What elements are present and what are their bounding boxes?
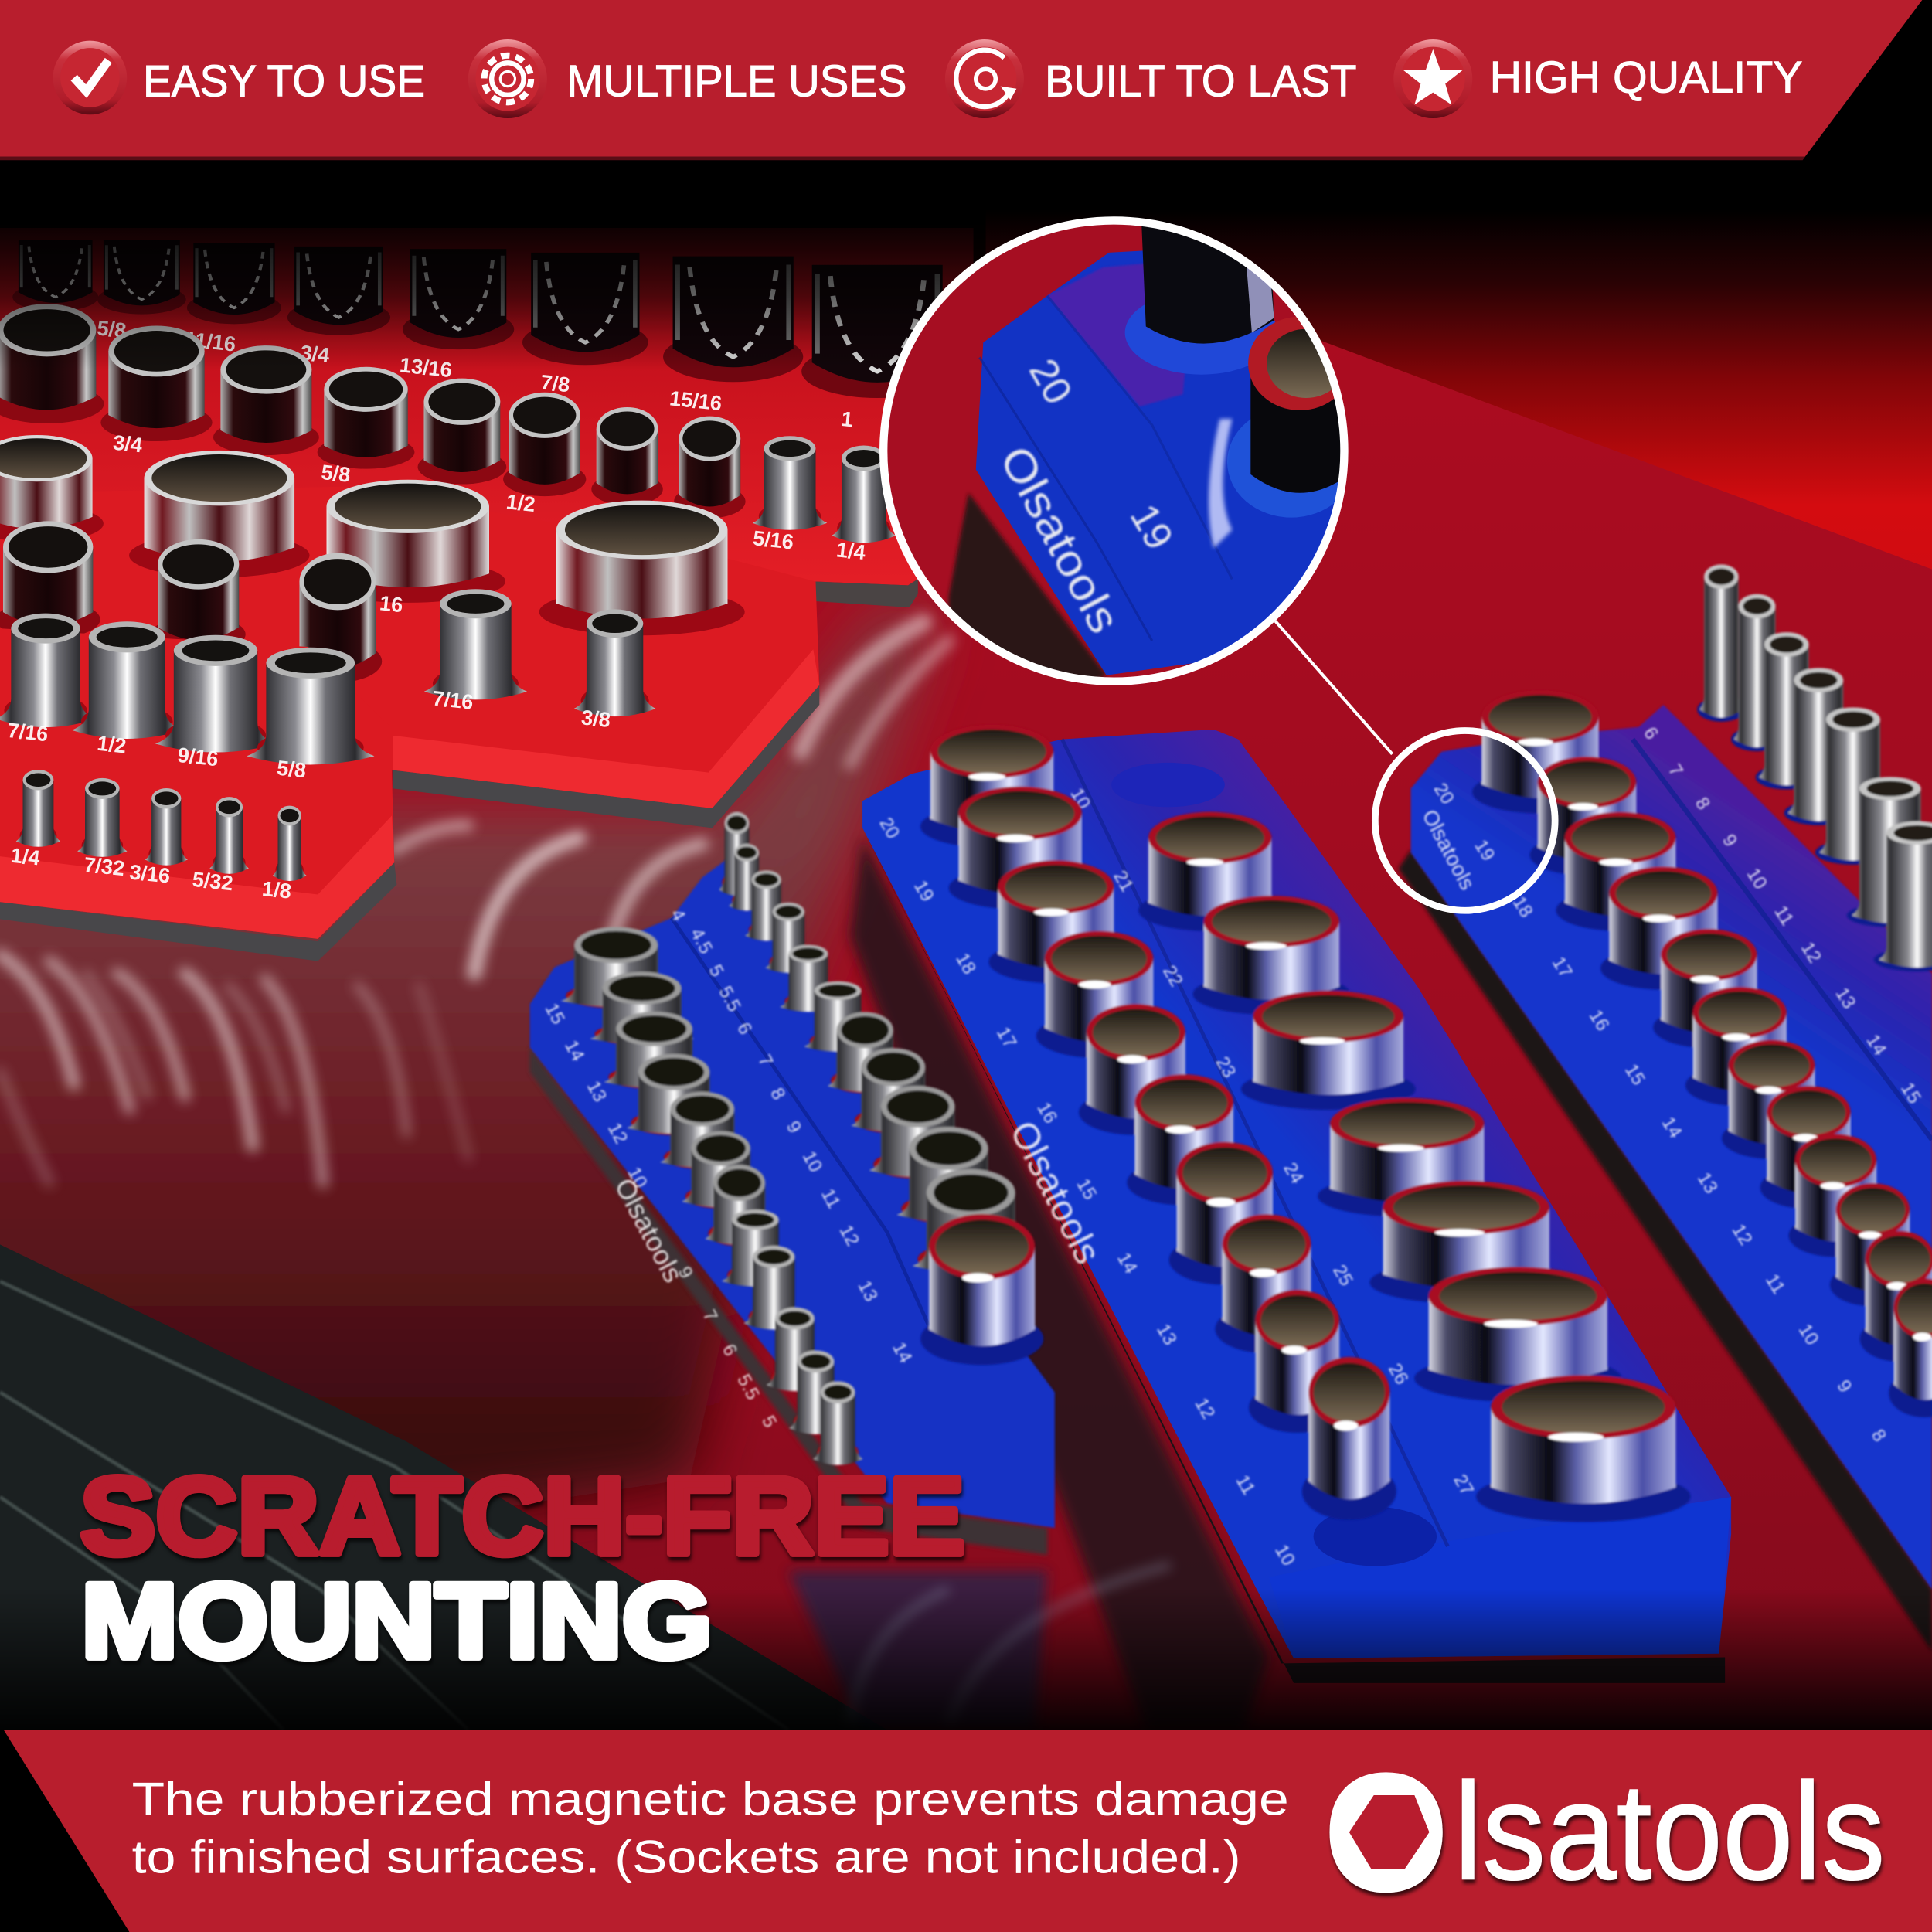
labels: middle tray sizes: 3/8: [580, 705, 611, 732]
labels: back tray lower sizes: 5/8: [320, 460, 352, 487]
labels: large tray numbers: 10: [1270, 1541, 1299, 1570]
labels: right tray numbers: 16: [1585, 1006, 1614, 1035]
labels: right tray numbers: 11: [1770, 902, 1798, 930]
labels: front tray sizes: 1/4: [10, 843, 41, 870]
labels: large tray numbers: 21: [1109, 867, 1138, 895]
labels: right tray numbers: 12: [1797, 938, 1825, 967]
labels: middle tray sizes: 7/16: [431, 686, 474, 714]
red tray: back row: [0, 228, 974, 607]
labels: front tray sizes: 5/32: [191, 867, 234, 895]
labels: small tray numbers: 4: [666, 906, 689, 925]
labels: back tray upper sizes: 3/4: [299, 340, 331, 367]
labels: right tray numbers: 17: [1548, 953, 1577, 981]
labels: right tray numbers: 18: [1509, 893, 1537, 921]
lens labels: 20, 19 and logo: 19: [1122, 497, 1182, 556]
bottom shadow above the footer: [0, 1590, 1932, 1730]
labels: right tray numbers: 10: [1743, 865, 1771, 893]
labels: right tray numbers: 9: [1718, 831, 1741, 850]
description text: [132, 1773, 1289, 1883]
labels: small tray numbers: 15: [541, 1000, 569, 1028]
labels: right tray numbers: [1418, 723, 1925, 1446]
labels: large tray numbers: 23: [1212, 1053, 1240, 1081]
logo: Olsatools: [1329, 1747, 1885, 1917]
sockets: right tray thin column: [1697, 564, 1932, 971]
labels: large tray numbers: 16: [1032, 1099, 1061, 1127]
labels: small tray numbers: Olsatools: [609, 1173, 689, 1287]
labels: small tray numbers: 7: [753, 1051, 777, 1070]
icon: star: [1393, 39, 1472, 118]
red tray: front: [0, 614, 396, 961]
callout line: small circle to lens: [1275, 621, 1393, 754]
labels: back tray upper sizes: 13/16: [399, 352, 453, 382]
labels: large tray numbers: 10: [1066, 784, 1094, 813]
blue tray: large centre: [862, 725, 1731, 1683]
lens socket: lower red-rimmed socket: [1227, 317, 1340, 518]
labels: small tray numbers: 5: [757, 1412, 781, 1431]
labels: large tray numbers: 24: [1279, 1159, 1308, 1187]
labels: back tray upper sizes: 1: [840, 406, 854, 431]
top shadow over far sockets: [0, 160, 986, 369]
labels: right tray numbers: 13: [1693, 1168, 1722, 1197]
labels: middle tray sizes: 16: [379, 590, 404, 617]
labels: large tray numbers: 25: [1328, 1261, 1357, 1290]
small focus circle on right tray: [1375, 730, 1555, 910]
labels: small tray numbers: 10: [623, 1164, 651, 1192]
labels: front tray sizes: 7/32: [83, 852, 126, 880]
labels: large tray numbers: Olsatools: [1002, 1114, 1108, 1270]
labels: small tray numbers: 4.5: [686, 925, 716, 957]
labels: small tray numbers: 10: [798, 1148, 826, 1175]
labels: right tray numbers: 15: [1896, 1079, 1925, 1107]
labels: right tray numbers: 8: [1867, 1426, 1890, 1446]
labels: large tray numbers: 26: [1384, 1360, 1413, 1388]
labels: back tray upper sizes: 15/16: [668, 386, 723, 415]
description text: to finished surfaces. (Sockets are not included.): [132, 1830, 1241, 1883]
labels: small tray numbers: 8: [766, 1084, 789, 1104]
headline line 2: MOUNTING: [81, 1562, 713, 1680]
labels: right tray numbers: 9: [1832, 1376, 1855, 1396]
logo: Olsatools: lsatools: [1454, 1753, 1885, 1908]
labels: right tray numbers: 19: [1470, 836, 1498, 865]
headline line 1: SCRATCH-FREE: [80, 1456, 964, 1578]
bottom banner: [4, 1730, 1932, 1932]
labels: large tray numbers: 20: [875, 814, 903, 842]
labels: small tray numbers: 14: [560, 1037, 588, 1065]
labels: large tray numbers: 12: [1191, 1394, 1219, 1423]
labels: large tray numbers: 13: [1152, 1321, 1181, 1349]
sockets: second row of chrome sockets: [0, 304, 896, 543]
lens labels: 20, 19 and logo: [1003, 359, 1172, 634]
black corner behind bottom banner: [0, 1730, 135, 1932]
labels: small tray numbers: 12: [835, 1222, 863, 1250]
magnifier lens: close-up of tray corner: [883, 209, 1355, 702]
labels: small tray numbers: 6: [733, 1019, 756, 1038]
labels: large tray numbers: [875, 784, 1478, 1570]
labels: back tray upper sizes: 5/8: [96, 315, 128, 342]
labels: right tray numbers: 12: [1728, 1220, 1757, 1249]
surface reflections: white streaks under the red trays: [0, 622, 949, 1183]
labels: right tray numbers: 7: [1664, 760, 1687, 781]
reflection: blue glow below the small tray: [788, 1565, 1171, 1730]
sockets: front tray upper row: [0, 614, 374, 764]
labels: front tray sizes: 1/8: [261, 876, 292, 903]
drawer edge: dark metal lower-left corner: [0, 1244, 887, 1730]
icon: gear: [468, 39, 547, 118]
sockets: far row of tall dark sockets: [12, 240, 953, 398]
labels: small tray numbers: 9: [782, 1117, 805, 1137]
labels: front tray sizes: 5/8: [276, 756, 308, 782]
labels: small tray numbers: 13: [854, 1277, 882, 1305]
labels: large tray numbers: 22: [1158, 962, 1187, 990]
lens labels: 20, 19 and logo: 20: [1021, 352, 1081, 411]
labels: large tray numbers: 17: [992, 1023, 1021, 1052]
labels: front tray sizes: 1/2: [96, 731, 128, 758]
labels: right tray numbers: 11: [1761, 1270, 1789, 1298]
labels: back tray lower sizes: 3/4: [112, 430, 144, 457]
labels: large tray numbers: 18: [951, 950, 980, 978]
labels: small tray numbers: 6: [718, 1341, 741, 1359]
feature: easy to use: EASY TO USE: [143, 56, 425, 106]
sockets: large tray right column: [1138, 812, 1691, 1522]
labels: small tray numbers: 14: [888, 1338, 916, 1366]
labels: large tray numbers: 15: [1073, 1175, 1100, 1203]
feature: built to last: BUILT TO LAST: [1045, 56, 1356, 106]
labels: small tray numbers: 11: [817, 1185, 845, 1212]
labels: front tray sizes: 3/16: [128, 859, 172, 888]
shadow: dark reflection beside the large tray: [850, 838, 1269, 1730]
labels: right tray numbers: Olsatools: [1418, 805, 1480, 894]
labels: small tray numbers: 5: [705, 961, 728, 980]
labels: front tray sizes: 9/16: [176, 743, 219, 770]
labels: small tray numbers: [541, 906, 916, 1431]
labels: back tray lower sizes: 1/4: [835, 537, 866, 564]
labels: large tray numbers: 14: [1113, 1249, 1141, 1277]
labels: front tray sizes: [6, 718, 308, 903]
labels: right tray numbers: 10: [1794, 1321, 1823, 1349]
labels: back tray lower sizes: 5/16: [752, 526, 795, 554]
labels: right tray numbers: 15: [1621, 1060, 1649, 1089]
labels: large tray numbers: 11: [1232, 1471, 1259, 1498]
top banner: [0, 0, 1922, 160]
labels: small tray numbers: 9: [674, 1263, 697, 1282]
feature: high quality: HIGH QUALITY: [1490, 53, 1803, 103]
labels: small tray numbers: 5.5: [714, 983, 745, 1015]
labels: back tray upper sizes: [96, 315, 854, 431]
labels: large tray numbers: 27: [1449, 1471, 1478, 1499]
labels: right tray numbers: 14: [1862, 1031, 1890, 1060]
glare highlight on the tray: [1209, 419, 1232, 549]
headline: [80, 1456, 964, 1680]
sockets: large tray left column: [920, 725, 1396, 1519]
sockets: right tray wide column: [1472, 690, 1932, 1417]
holes: empty sockets: [1111, 763, 1437, 1566]
labels: small tray numbers: 12: [604, 1119, 631, 1148]
labels: large tray numbers: 19: [910, 877, 938, 905]
lens labels: 20, 19 and logo: Olsatools: [990, 438, 1129, 641]
labels: right tray numbers: 14: [1658, 1114, 1686, 1142]
labels: back tray lower sizes: [112, 430, 866, 564]
blue tray: right pair: [1399, 564, 1932, 1651]
labels: back tray lower sizes: 1/2: [505, 489, 536, 516]
labels: small tray numbers: 7: [699, 1306, 722, 1325]
sockets: small tray chrome: [561, 812, 1043, 1465]
labels: right tray numbers: 20: [1430, 780, 1458, 808]
labels: small tray numbers: 13: [583, 1077, 611, 1105]
red tray: middle: [0, 435, 819, 828]
icon: check mark: [53, 41, 127, 114]
feature: multiple uses: MULTIPLE USES: [566, 56, 906, 106]
labels: small tray numbers: 5.5: [733, 1371, 764, 1403]
blue tray: small front-left: [530, 812, 1055, 1555]
description text: The rubberized magnetic base prevents damage: [132, 1773, 1289, 1825]
labels: back tray upper sizes: 7/8: [539, 370, 571, 396]
labels: right tray numbers: 13: [1831, 984, 1859, 1012]
labels: front tray sizes: 7/16: [6, 718, 49, 746]
labels: back tray upper sizes: 11/16: [183, 327, 237, 356]
logo: Olsatools: O: [1329, 1747, 1443, 1917]
sockets: middle tray: [0, 435, 745, 716]
black corner behind top banner: [1774, 0, 1932, 162]
labels: right tray numbers: 8: [1691, 794, 1714, 814]
icon: renewal gear: [945, 39, 1024, 118]
labels: middle tray sizes: [379, 590, 611, 732]
lens socket: upper dark socket: [1125, 226, 1275, 375]
sockets: front tray lower row: [16, 770, 306, 881]
labels: right tray numbers: 6: [1639, 723, 1662, 743]
